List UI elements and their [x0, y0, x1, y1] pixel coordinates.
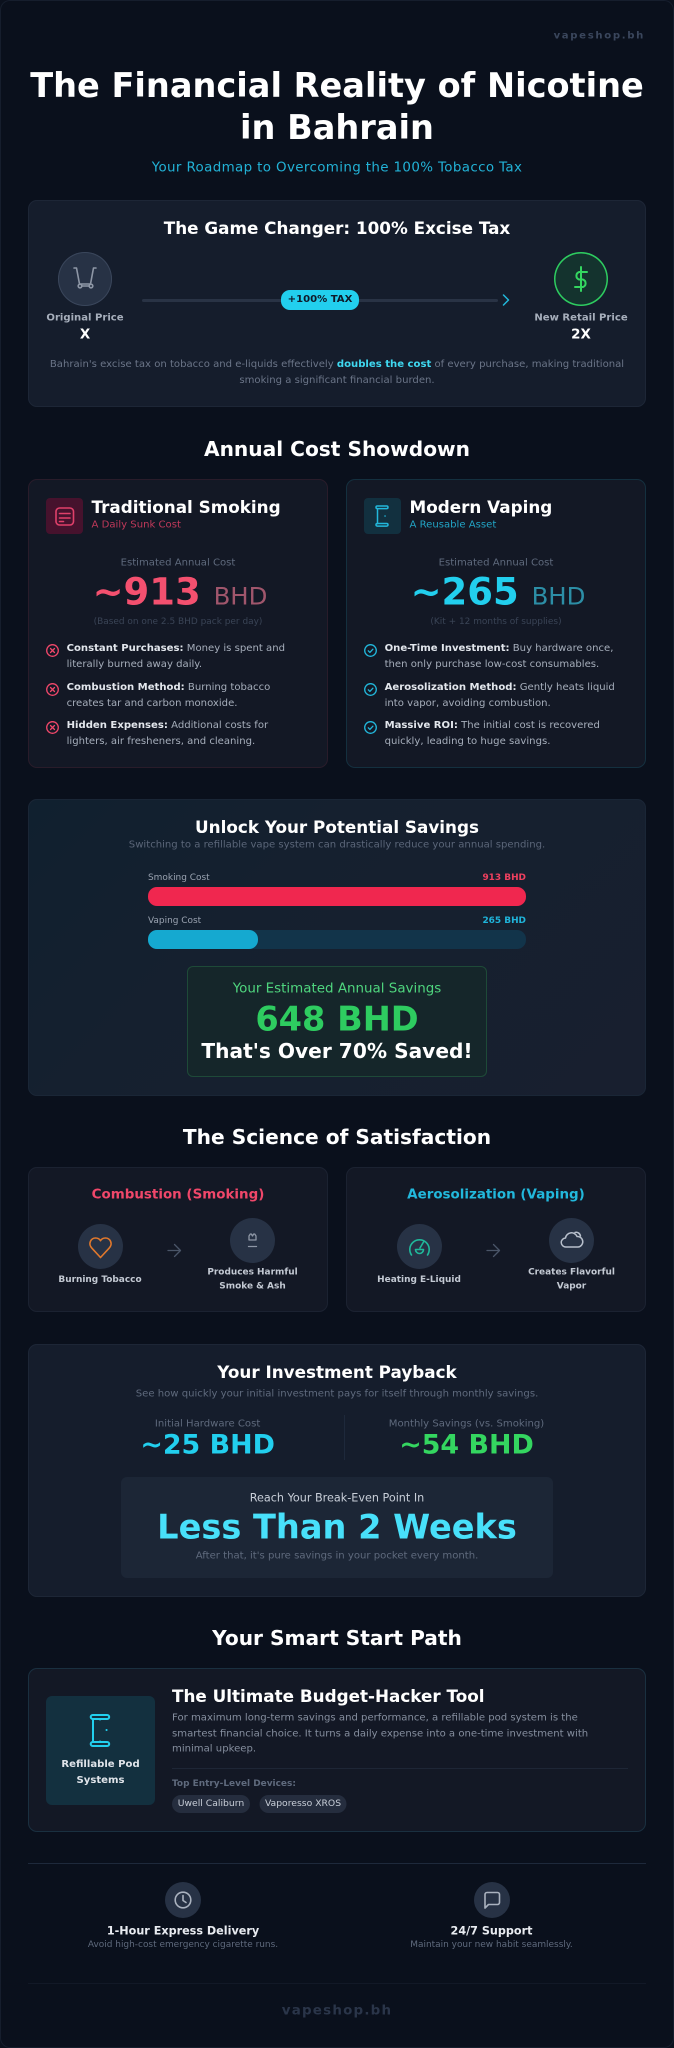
panel: modern vaping [346, 479, 646, 768]
vaping bar fill [148, 930, 258, 948]
step label: Heating E-Liquid [377, 1275, 461, 1285]
list item [46, 720, 268, 747]
device pill: Uwell Caliburn [178, 1798, 244, 1809]
list item [364, 643, 613, 670]
tool description: smartest financial choice. It turns a daily expense into a one-time investment with [172, 1728, 588, 1739]
cost note: (Based on one 2.5 BHD pack per day) [94, 617, 262, 627]
device pill [260, 1795, 346, 1813]
brand tag bottom: vapeshop.bh [282, 2004, 392, 2018]
icon: chat bubble [474, 1882, 510, 1918]
callout note: After that, it's pure savings in your pocket every month. [196, 1550, 478, 1562]
stat divider [344, 1415, 345, 1460]
list item: lighters, air fresheners, and cleaning. [67, 736, 255, 747]
subtitle: Your Roadmap to Overcoming the 100% Tobacco Tax [152, 160, 522, 176]
smoking bar [148, 887, 526, 906]
icon: shopping cart [58, 252, 112, 306]
panel: budget hacker tool [28, 1668, 646, 1832]
panel heading: Aerosolization (Vaping) [407, 1188, 585, 1202]
original price value: X [80, 328, 90, 342]
list item: One-Time Investment: Buy hardware once, [385, 643, 613, 654]
list item: creates tar and carbon monoxide. [67, 698, 237, 709]
icon: smoke and ash [230, 1218, 275, 1263]
new price value: 2X [571, 328, 591, 342]
cost note: (Kit + 12 months of supplies) [430, 617, 562, 627]
list item: Constant Purchases: Money is spent and [67, 643, 285, 654]
cost value: ~913 BHD [93, 570, 267, 614]
section heading: showdown: Annual Cost Showdown [204, 437, 470, 461]
panel subheading: See how quickly your initial investment pays for itself through monthly savings. [136, 1388, 538, 1400]
panel: combustion [28, 1167, 328, 1312]
explanation text: Bahrain's excise tax on tobacco and e-liquids effectively doubles the cost of every purchase, making traditional [50, 359, 624, 370]
arrow line with tax badge [142, 290, 510, 310]
icon: heating gauge [396, 1224, 442, 1269]
section heading: science: The Science of Satisfaction [183, 1125, 491, 1149]
list item: Massive ROI: The initial cost is recovered [385, 720, 600, 731]
new price label: New Retail Price [534, 312, 628, 324]
icon: vapor cloud [549, 1218, 594, 1263]
list item: literally burned away daily. [67, 659, 202, 670]
card subtitle: A Reusable Asset [410, 520, 496, 530]
icon: burning tobacco [78, 1224, 122, 1269]
callout label: Your Estimated Annual Savings [233, 982, 441, 996]
arrow [486, 1244, 500, 1258]
list item [46, 682, 270, 709]
step label: Produces Harmful [207, 1267, 298, 1277]
step label [528, 1267, 615, 1291]
card title: Traditional Smoking [92, 497, 281, 517]
panel heading: Unlock Your Potential Savings [195, 817, 479, 837]
feature description: Avoid high-cost emergency cigarette runs. [88, 1940, 278, 1950]
callout label: Reach Your Break-Even Point In [250, 1492, 424, 1504]
stat label: Monthly Savings (vs. Smoking) [389, 1418, 544, 1430]
panel subheading: Switching to a refillable vape system can drastically reduce your annual spending. [129, 840, 545, 850]
panel heading: Your Investment Payback [217, 1362, 457, 1382]
explanation text [50, 359, 624, 386]
list item: quickly, leading to huge savings. [385, 736, 550, 747]
icon: dollar [554, 252, 608, 306]
bar chart [148, 873, 526, 949]
icon: vape pod [364, 498, 401, 534]
list item: then only purchase low-cost consumables. [385, 659, 599, 670]
title [30, 66, 644, 147]
tile label: Refillable Pod [61, 1759, 140, 1770]
step label: Smoke & Ash [219, 1281, 286, 1291]
explanation text: smoking a significant financial burden. [239, 375, 435, 386]
vaping label: Vaping Cost [148, 916, 201, 926]
list item: into vapor, avoiding combustion. [385, 698, 551, 709]
cost label: Estimated Annual Cost [439, 558, 553, 568]
step label [207, 1267, 298, 1291]
title: in Bahrain [240, 108, 434, 147]
panel heading: The Game Changer: 100% Excise Tax [164, 218, 510, 238]
stat value: ~54 BHD [399, 1430, 534, 1460]
device pill: Vaporesso XROS [265, 1798, 341, 1809]
panel: savings [28, 799, 646, 1096]
stat value: ~25 BHD [140, 1430, 275, 1460]
step label: Creates Flavorful [528, 1267, 615, 1277]
list item: Aerosolization Method: Gently heats liquid [385, 682, 615, 693]
tax badge [281, 290, 359, 310]
panel: excise tax [28, 200, 646, 407]
smoking label: Smoking Cost [148, 873, 210, 883]
feature description: Maintain your new habit seamlessly. [410, 1940, 573, 1950]
cost label: Estimated Annual Cost [121, 558, 235, 568]
feature: express delivery [88, 1882, 278, 1950]
tool description [172, 1712, 588, 1755]
icon: refillable pod [90, 1714, 110, 1747]
arrow [167, 1244, 182, 1258]
arrow head [502, 294, 510, 306]
list item: Hidden Expenses: Additional costs for [67, 720, 268, 731]
tool description: minimal upkeep. [172, 1744, 256, 1755]
icon: cigarette pack [46, 498, 83, 534]
savings callout [187, 966, 487, 1077]
brand tag top: vapeshop.bh [554, 30, 645, 42]
icon: clock [165, 1882, 201, 1918]
cost value: ~265 BHD [411, 570, 585, 614]
card subtitle: A Daily Sunk Cost [92, 520, 181, 530]
feature: support [410, 1882, 573, 1950]
card title: Modern Vaping [410, 497, 552, 517]
tax badge: +100% TAX [288, 294, 352, 305]
feature title: 24/7 Support [451, 1924, 532, 1938]
list item [364, 682, 615, 709]
panel heading: Combustion (Smoking) [92, 1188, 264, 1202]
smoking value: 913 BHD [482, 873, 526, 883]
feature title: 1-Hour Express Delivery [107, 1924, 259, 1938]
stat label: Initial Hardware Cost [155, 1418, 260, 1430]
device pill [172, 1795, 250, 1813]
panel: investment payback [28, 1344, 646, 1597]
tool title: The Ultimate Budget-Hacker Tool [172, 1686, 485, 1706]
title: The Financial Reality of Nicotine [30, 66, 644, 105]
tile label: Systems [76, 1775, 124, 1786]
section heading: start path: Your Smart Start Path [212, 1626, 462, 1650]
tile label [61, 1759, 140, 1786]
panel: aerosolization [346, 1167, 646, 1312]
panel: traditional smoking [28, 479, 328, 768]
step label: Burning Tobacco [58, 1275, 142, 1285]
device tile [46, 1696, 155, 1805]
list item: Combustion Method: Burning tobacco [67, 682, 270, 693]
break-even callout [121, 1477, 553, 1578]
step label: Vapor [557, 1281, 586, 1291]
tool description: For maximum long-term savings and performance, a refillable pod system is the [172, 1712, 578, 1723]
original price label: Original Price [46, 312, 124, 324]
device list label: Top Entry-Level Devices: [172, 1779, 296, 1789]
vaping bar [148, 930, 526, 948]
list item [364, 720, 600, 747]
callout value: Less Than 2 Weeks [157, 1508, 517, 1546]
vaping value: 265 BHD [482, 916, 526, 926]
savings percentage: That's Over 70% Saved! [201, 1039, 473, 1063]
list item [46, 643, 285, 670]
savings amount: 648 BHD [255, 1000, 419, 1038]
